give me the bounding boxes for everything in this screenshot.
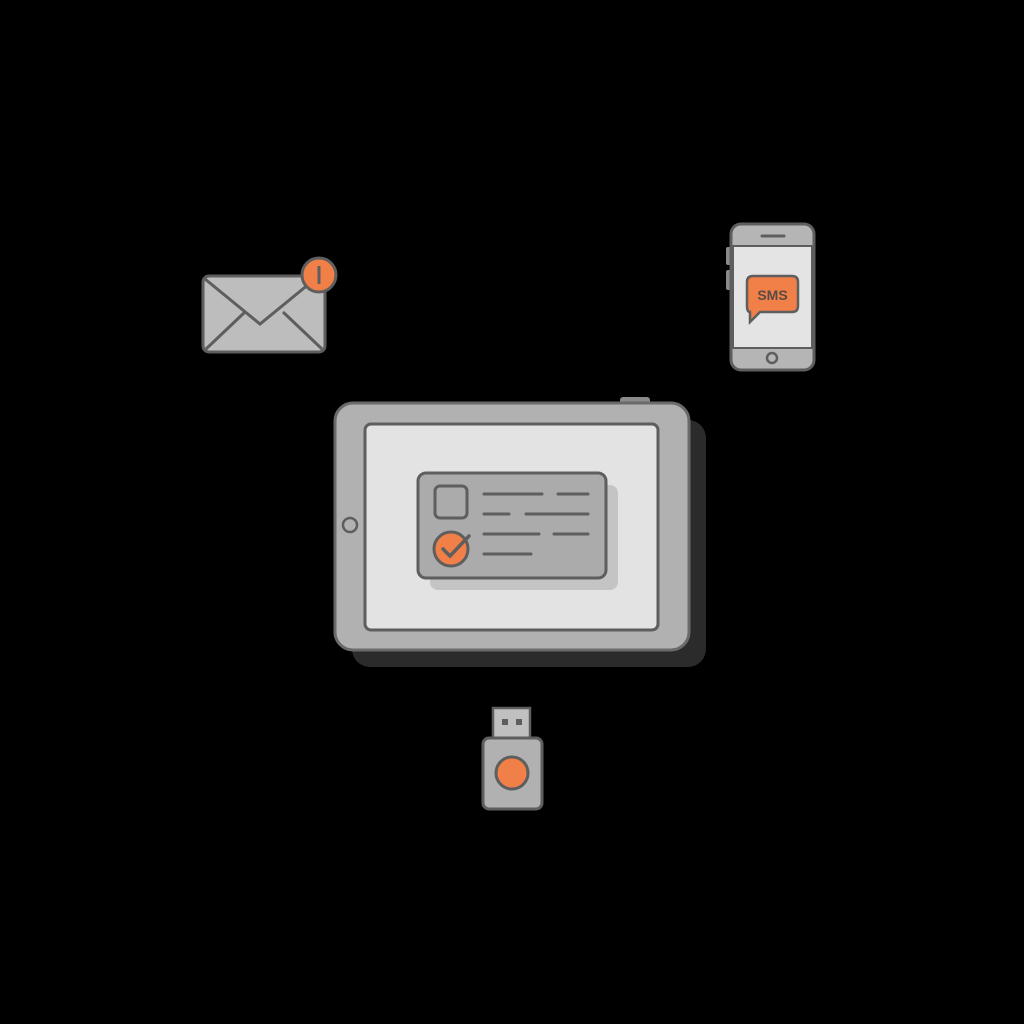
tablet xyxy=(335,397,706,667)
icon: USB security key xyxy=(483,708,542,809)
badge xyxy=(302,258,336,292)
SMS bubble: SMS xyxy=(757,287,788,303)
SMS bubble xyxy=(747,276,798,322)
icon: phone with SMS xyxy=(726,224,814,370)
ID card form xyxy=(418,473,618,590)
icon: envelope with notification xyxy=(203,258,336,352)
check icon xyxy=(434,532,469,566)
